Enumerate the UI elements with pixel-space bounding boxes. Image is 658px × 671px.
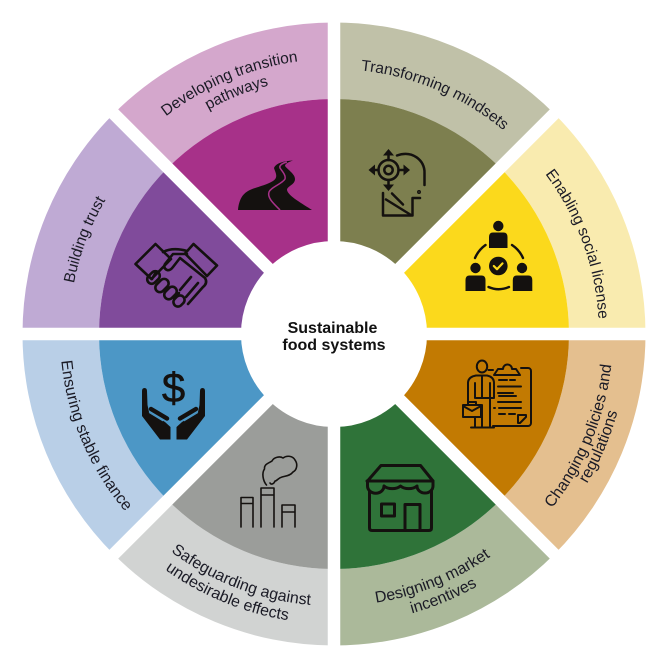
label: designing market incentives: incentives [410,580,476,614]
panel: changing policies and regulations [404,340,646,550]
panel: building trust [22,118,264,328]
label: developing transition pathways: pathways [205,78,268,112]
label: changing policies and regulations: Changing policies and [546,364,612,506]
icon: people around a check mark [466,221,532,291]
panel: transforming mindsets [340,22,550,264]
label: developing transition pathways: Developing transition [160,53,297,116]
title: centre label: Sustainable [288,320,378,337]
title: centre label: food systems [282,337,386,354]
label: safeguarding against undesirable effects: Safeguarding against [172,544,311,605]
panel: enabling social license [404,118,646,328]
label: enabling social license: Enabling social license [546,168,606,318]
label: ensuring stable finance: Ensuring stable finance [61,360,130,510]
icon: person with clipboard [463,360,531,428]
label: changing policies and regulations: regulations [580,410,617,483]
label: designing market incentives: Designing market [375,549,490,602]
icon: winding road [238,160,312,210]
label: building trust: Building trust [64,196,106,282]
icon: head with target [368,149,425,216]
panel: safeguarding against undesirable effects [118,404,328,646]
panel: ensuring stable finance [22,340,264,550]
icon: handshake [136,244,217,308]
panel: designing market incentives [340,404,550,646]
icon: hands holding dollar: $ [162,364,185,411]
icon: hands holding dollar [142,364,205,440]
icon: smoking chimneys [241,456,297,527]
icon: shop front [367,466,433,530]
label: safeguarding against undesirable effects: undesirable effects [166,563,288,620]
label: transforming mindsets: Transforming mindsets [362,60,508,130]
panel: developing transition pathways [118,22,328,264]
